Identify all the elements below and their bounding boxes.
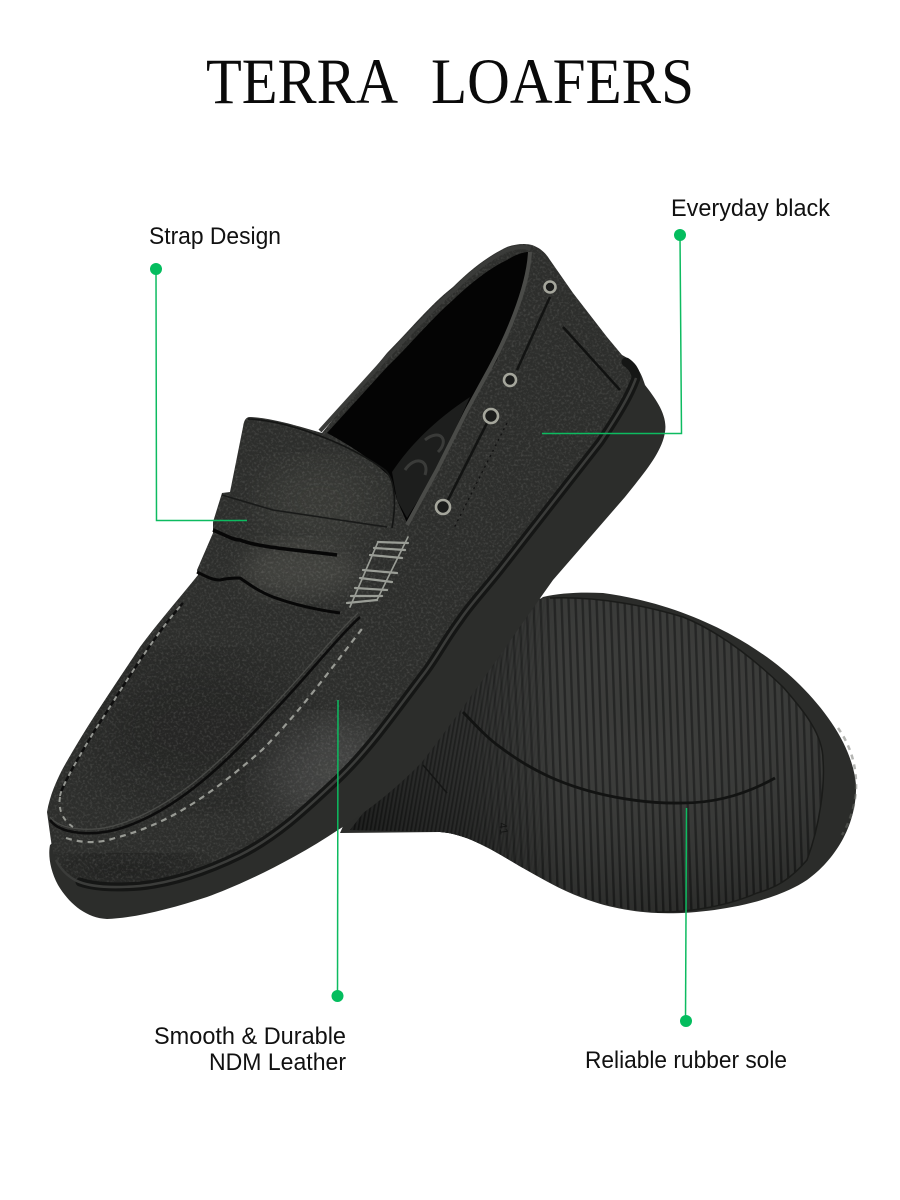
callout: strap design: Strap Design: [149, 223, 281, 250]
illustration: pair of black loafers: [40, 240, 856, 920]
front shoe: eyelets and laces: [436, 282, 620, 530]
callout: reliable rubber sole: [585, 808, 787, 1074]
callout: strap design: [149, 223, 281, 520]
front shoe: welt: [56, 362, 636, 887]
title: [206, 46, 694, 118]
front shoe: outsole: [49, 355, 665, 919]
rear shoe: rubber outsole: [340, 590, 856, 920]
callout: smooth and durable leather: NDM Leather: [209, 1049, 346, 1076]
callout: smooth and durable leather: [154, 700, 346, 1076]
title: LOAFERS: [431, 46, 694, 118]
title: TERRA: [206, 46, 398, 118]
front shoe: collar opening and insole: [320, 247, 531, 525]
front shoe: moccasin seam with stitches: [50, 603, 365, 842]
callout: everyday black: [542, 195, 831, 434]
callout: everyday black: Everyday black: [671, 195, 831, 222]
callout: reliable rubber sole: Reliable rubber sole: [585, 1047, 787, 1074]
rear shoe: rubber outsole: 41: [496, 822, 510, 836]
front shoe: hand-sewn cross stitching: [347, 537, 408, 607]
callout: smooth and durable leather: Smooth & Durable: [154, 1023, 346, 1050]
front shoe: leather upper: [40, 240, 640, 900]
front shoe: penny strap details: [197, 419, 394, 613]
